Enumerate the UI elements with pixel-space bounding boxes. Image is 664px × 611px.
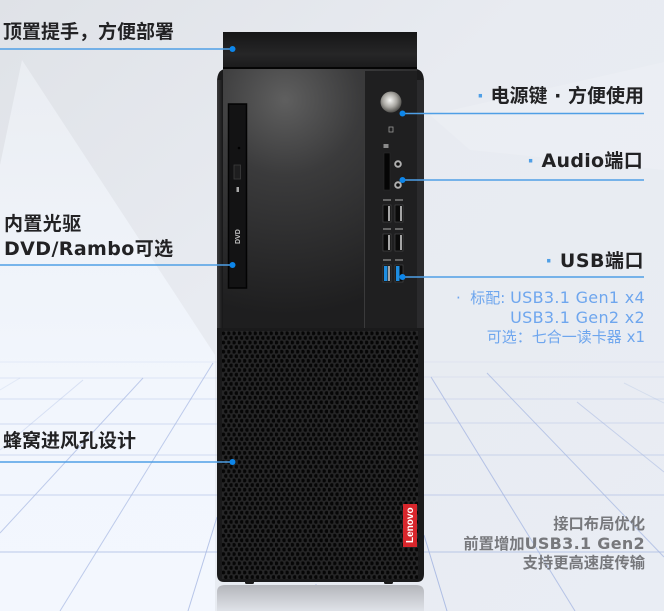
callout line: power button bbox=[400, 110, 644, 116]
USB ports bbox=[383, 199, 403, 282]
feet bbox=[245, 581, 254, 584]
desktop tower bbox=[217, 32, 424, 584]
note: interface layout: 前置增加USB3.1 Gen2 bbox=[463, 534, 645, 553]
callout line: optical drive bbox=[0, 262, 236, 268]
note: interface layout: 接口布局优化 bbox=[553, 515, 645, 533]
label: audio port: · Audio端口 bbox=[527, 150, 643, 172]
optical drive: DVD bbox=[235, 229, 242, 244]
callout line: USB bbox=[400, 274, 644, 280]
callout line: vent bbox=[0, 459, 236, 465]
power button bbox=[380, 92, 402, 112]
USB specification notes bbox=[456, 288, 645, 346]
label: honeycomb vent: 蜂窝进风孔设计 bbox=[3, 430, 136, 452]
USB specification notes: 可选：七合一读卡器 x1 bbox=[487, 328, 645, 346]
USB specification notes: · 标配: USB3.1 Gen1 x4 bbox=[456, 288, 645, 307]
label: optical drive: 内置光驱 bbox=[4, 213, 82, 235]
lock icon bbox=[389, 127, 393, 132]
Lenovo logo badge bbox=[403, 504, 417, 547]
callout line: top handle bbox=[0, 46, 236, 52]
honeycomb vent grille bbox=[222, 331, 418, 579]
audio jacks bbox=[395, 161, 401, 188]
label: USB port: · USB端口 bbox=[545, 250, 644, 272]
callout line: audio bbox=[400, 177, 644, 183]
label: top handle: 顶置提手，方便部署 bbox=[3, 21, 174, 43]
label: optical drive bbox=[4, 213, 174, 260]
optical drive bbox=[228, 104, 246, 288]
label: power button: · 电源键 · 方便使用 bbox=[477, 85, 644, 107]
label: optical drive: DVD/Rambo可选 bbox=[4, 238, 174, 260]
tower body bbox=[217, 69, 424, 582]
note: interface layout: 支持更高速度传输 bbox=[523, 554, 645, 572]
Lenovo logo badge: Lenovo bbox=[405, 507, 416, 543]
card reader bbox=[384, 153, 390, 190]
note: interface layout bbox=[463, 515, 645, 572]
USB specification notes: USB3.1 Gen2 x2 bbox=[510, 308, 645, 327]
front panel bbox=[223, 69, 417, 328]
tower reflection bbox=[217, 585, 424, 611]
top handle bbox=[223, 32, 417, 69]
